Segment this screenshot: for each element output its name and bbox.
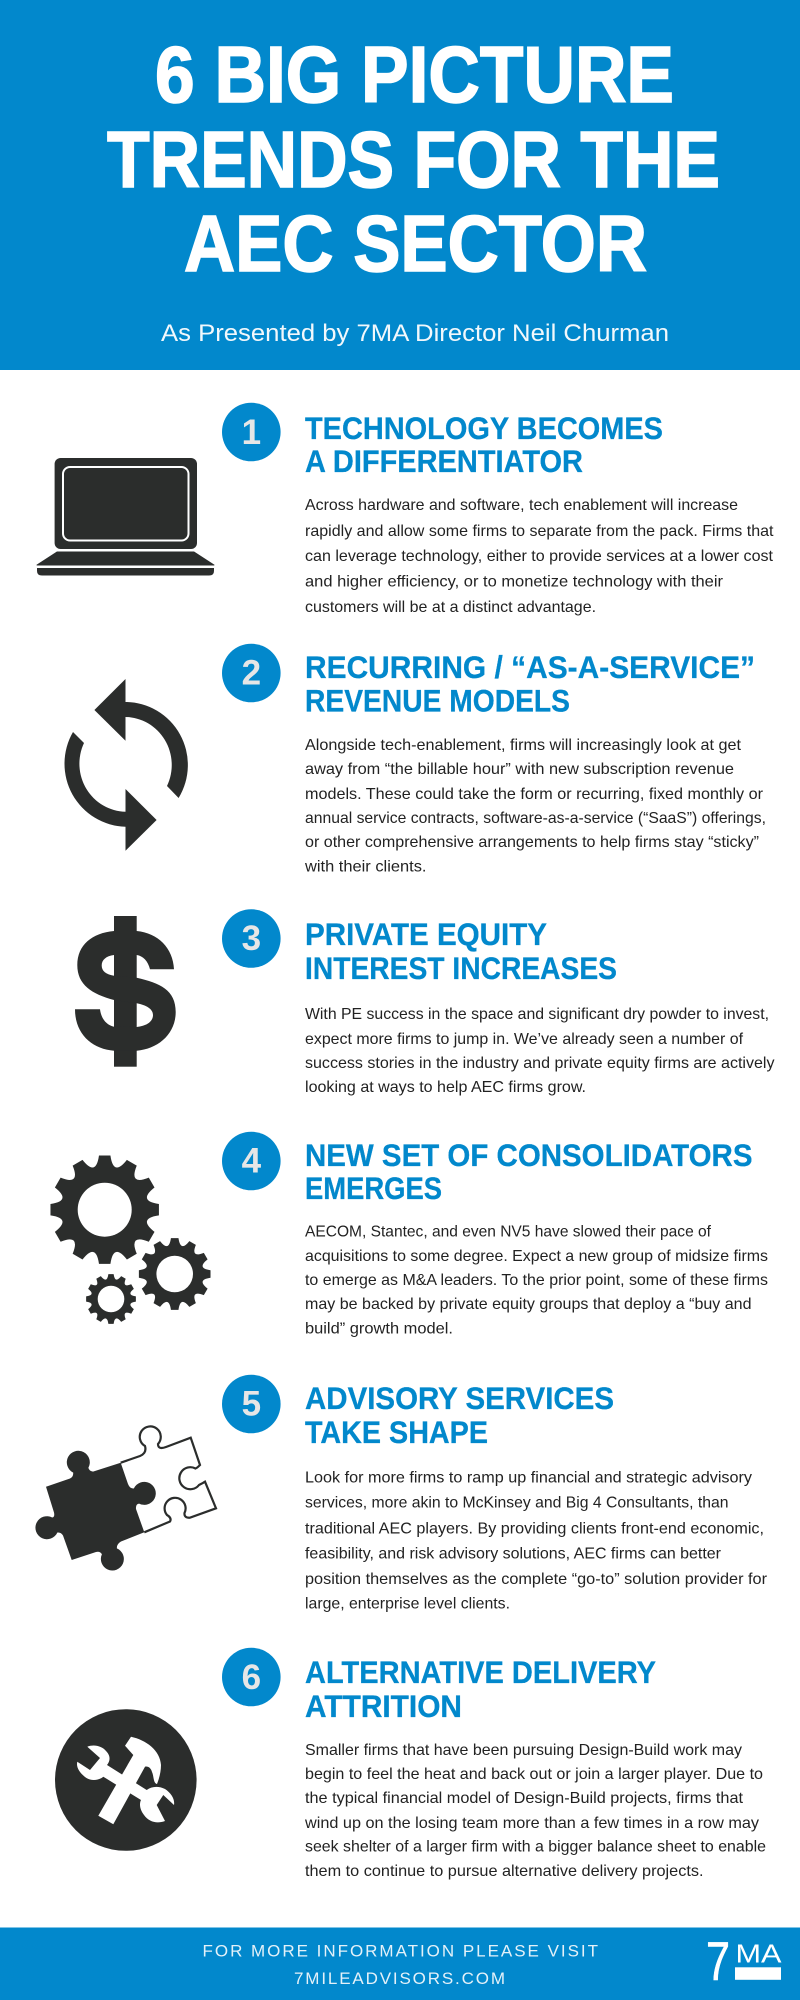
heading 3: INTEREST INCREASES — [305, 950, 617, 986]
body text 1 — [305, 497, 774, 616]
body text 2: away from “the billable hour” with new subscription revenue — [305, 761, 734, 778]
body text 5: large, enterprise level clients. — [305, 1596, 510, 1612]
body text 2: with their clients. — [304, 858, 426, 876]
heading 4: EMERGES — [305, 1170, 442, 1206]
body text 5: services, more akin to McKinsey and Big 4 Consultants, than — [305, 1494, 728, 1512]
number badge 5: 5 — [242, 1384, 261, 1424]
footer band — [0, 1928, 800, 2000]
panel: trend 1 technology — [37, 403, 774, 616]
title — [107, 30, 720, 288]
panel: trend 3 private equity — [75, 909, 774, 1096]
panel: trend 5 advisory services — [35, 1375, 768, 1612]
body text 6: them to continue to pursue alternative delivery projects. — [305, 1863, 704, 1880]
subtitle: As Presented by 7MA Director Neil Churman — [161, 320, 669, 347]
body text 3 — [305, 1006, 774, 1096]
title: TRENDS FOR THE — [107, 115, 720, 204]
body text 1: customers will be at a distinct advantage. — [305, 599, 596, 616]
number badge 3: 3 — [242, 919, 261, 958]
body text 4: to emerge as M&A leaders. To the prior point, some of these firms — [305, 1272, 768, 1289]
body text 1: Across hardware and software, tech enablement will increase — [305, 497, 738, 514]
body text 2: or other comprehensive arrangements to help firms stay “sticky” — [305, 834, 759, 851]
header band — [0, 0, 800, 370]
number badge 4 — [222, 1132, 281, 1190]
body text 1: and higher efficiency, or to monetize technology with their — [305, 574, 724, 590]
icon: dollar sign — [75, 916, 176, 1067]
body text 5: feasibility, and risk advisory solutions, AEC firms can better — [305, 1546, 722, 1562]
body text 6: begin to feel the heat and back out or join a larger player. Due to — [305, 1766, 763, 1783]
body text 3: With PE success in the space and significant dry powder to invest, — [305, 1006, 769, 1023]
body text 3: success stories in the industry and private equity firms are actively — [305, 1055, 774, 1072]
icon: gears — [50, 1155, 211, 1324]
title: AEC SECTOR — [184, 199, 647, 288]
body text 3: looking at ways to help AEC firms grow. — [305, 1079, 586, 1096]
body text 2: annual service contracts, software-as-a-service (“SaaS”) offerings, — [305, 810, 766, 827]
body text 6 — [304, 1742, 766, 1880]
footer call to action — [202, 1942, 598, 1988]
icon: hammer and wrench — [55, 1709, 197, 1851]
number badge 2: 2 — [242, 654, 261, 692]
heading 1 — [305, 410, 663, 479]
heading 4 — [305, 1137, 752, 1206]
heading 6 — [305, 1654, 656, 1724]
heading 1: A DIFFERENTIATOR — [305, 443, 583, 479]
body text 3: expect more firms to jump in. We’ve already seen a number of — [305, 1031, 744, 1048]
icon: puzzle pieces — [35, 1426, 216, 1570]
body text 5: traditional AEC players. By providing clients front-end economic, — [305, 1520, 764, 1538]
number badge 1: 1 — [242, 413, 261, 452]
body text 1: rapidly and allow some firms to separate from the pack. Firms that — [305, 523, 774, 540]
heading 5: ADVISORY SERVICES — [305, 1380, 614, 1416]
logo: 7MA — [706, 1930, 783, 1992]
logo: 7MA: MA — [736, 1941, 783, 1969]
title: 6 BIG PICTURE — [155, 30, 674, 119]
logo: 7MA: 7 — [706, 1930, 730, 1992]
body text 4: AECOM, Stantec, and even NV5 have slowed their pace of — [305, 1224, 712, 1240]
body text 6: seek shelter of a larger firm with a bigger balance sheet to enable — [305, 1838, 766, 1856]
heading 5 — [305, 1380, 614, 1450]
body text 6: wind up on the losing team more than a few times in a row may — [304, 1815, 759, 1832]
number badge 1 — [222, 403, 281, 461]
body text 5: Look for more firms to ramp up financial and strategic advisory — [305, 1470, 752, 1486]
number badge 6: 6 — [242, 1658, 261, 1697]
heading 6: ATTRITION — [305, 1688, 462, 1724]
body text 4 — [305, 1224, 768, 1338]
heading 5: TAKE SHAPE — [305, 1414, 488, 1450]
icon: refresh arrows — [65, 679, 188, 851]
heading 2 — [305, 649, 755, 718]
heading 3: PRIVATE EQUITY — [305, 916, 547, 952]
heading 2: RECURRING / “AS-A-SERVICE” — [305, 649, 755, 685]
panel: trend 4 consolidators — [50, 1132, 768, 1338]
body text 4: acquisitions to some degree. Expect a new group of midsize firms — [305, 1248, 768, 1265]
number badge 4: 4 — [242, 1142, 262, 1180]
number badge 2 — [222, 644, 281, 702]
body text 5 — [305, 1470, 768, 1612]
panel: trend 6 alternative delivery — [55, 1648, 766, 1880]
number badge 5 — [222, 1375, 281, 1433]
body text 2: models. These could take the form or recurring, fixed monthly or — [305, 786, 764, 803]
number badge 6 — [222, 1648, 281, 1706]
body text 5: position themselves as the complete “go-to” solution provider for — [305, 1571, 768, 1588]
body text 6: the typical financial model of Design-Build projects, firms that — [305, 1790, 744, 1807]
panel: trend 2 recurring revenue — [65, 644, 766, 876]
heading 3 — [305, 916, 617, 986]
heading 4: NEW SET OF CONSOLIDATORS — [305, 1137, 752, 1173]
heading 6: ALTERNATIVE DELIVERY — [305, 1654, 656, 1690]
icon: laptop — [37, 458, 214, 576]
heading 1: TECHNOLOGY BECOMES — [305, 410, 663, 446]
footer call to action: 7MILEADVISORS.COM — [294, 1969, 505, 1988]
body text 2 — [304, 737, 766, 876]
body text 4: build” growth model. — [305, 1320, 453, 1338]
footer call to action: FOR MORE INFORMATION PLEASE VISIT — [202, 1942, 598, 1960]
body text 6: Smaller firms that have been pursuing Design-Build work may — [305, 1742, 742, 1759]
body text 2: Alongside tech-enablement, firms will increasingly look at get — [305, 737, 742, 754]
heading 2: REVENUE MODELS — [305, 682, 570, 718]
body text 1: can leverage technology, either to provide services at a lower cost — [305, 548, 774, 565]
number badge 3 — [222, 909, 281, 968]
body text 4: may be backed by private equity groups that deploy a “buy and — [305, 1296, 752, 1313]
